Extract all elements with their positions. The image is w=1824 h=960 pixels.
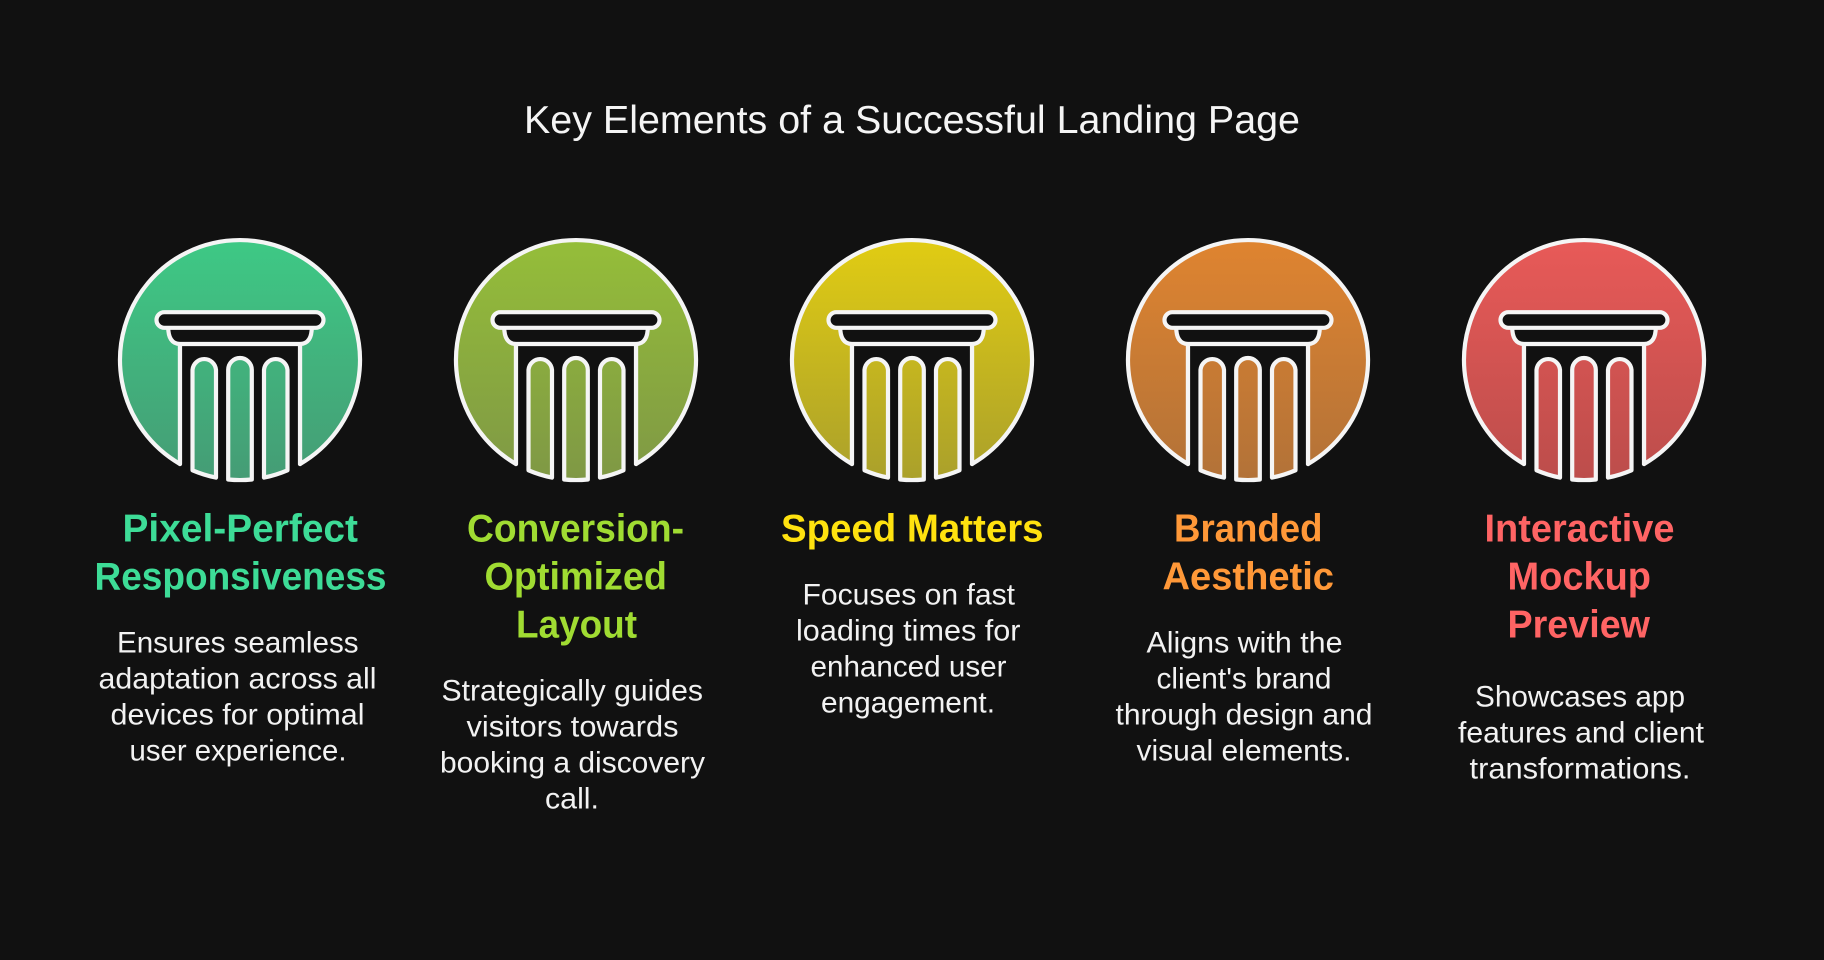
heading: branded aesthetic: Branded bbox=[1174, 508, 1322, 551]
icon: orange pillar bbox=[1128, 240, 1368, 480]
description: pixel-perfect responsiveness: adaptation across all bbox=[98, 662, 376, 695]
heading: interactive mockup preview: Preview bbox=[1508, 604, 1651, 647]
icon: green pillar bbox=[120, 240, 360, 480]
description: interactive mockup preview: transformations. bbox=[1470, 752, 1690, 786]
description: speed matters: engagement. bbox=[821, 686, 995, 719]
description: interactive mockup preview bbox=[1458, 680, 1704, 786]
description: branded aesthetic: visual elements. bbox=[1136, 734, 1352, 767]
title: Key Elements of a Successful Landing Page bbox=[524, 99, 1300, 142]
heading: interactive mockup preview bbox=[1484, 508, 1674, 647]
heading: conversion-optimized layout: Layout bbox=[516, 604, 637, 647]
description: speed matters: loading times for bbox=[796, 614, 1021, 647]
icon: yellow pillar bbox=[792, 240, 1032, 480]
description: pixel-perfect responsiveness: Ensures seamless bbox=[117, 626, 358, 659]
heading: interactive mockup preview: Interactive bbox=[1484, 508, 1674, 551]
panel: interactive mockup preview bbox=[1458, 240, 1704, 786]
description: conversion-optimized layout: booking a discovery bbox=[440, 746, 705, 780]
description: conversion-optimized layout: Strategically guides bbox=[442, 674, 703, 708]
description: speed matters: Focuses on fast bbox=[802, 578, 1015, 611]
description: conversion-optimized layout: call. bbox=[545, 782, 599, 816]
heading: conversion-optimized layout bbox=[467, 508, 684, 647]
description: branded aesthetic: client's brand bbox=[1156, 662, 1332, 695]
icon: red pillar bbox=[1464, 240, 1704, 480]
heading: pixel-perfect responsiveness: Pixel-Perfect bbox=[122, 508, 358, 551]
panel: speed matters bbox=[781, 240, 1044, 719]
description: pixel-perfect responsiveness: user experience. bbox=[130, 734, 346, 767]
heading: conversion-optimized layout: Conversion- bbox=[467, 508, 684, 551]
panel: conversion-optimized layout bbox=[440, 240, 705, 816]
heading: branded aesthetic: Aesthetic bbox=[1162, 556, 1334, 599]
heading: conversion-optimized layout: Optimized bbox=[484, 556, 667, 599]
description: interactive mockup preview: features and client bbox=[1458, 716, 1704, 750]
heading: branded aesthetic bbox=[1162, 508, 1334, 599]
description: branded aesthetic bbox=[1116, 626, 1372, 767]
description: pixel-perfect responsiveness: devices for optimal bbox=[110, 698, 364, 731]
panel: branded aesthetic bbox=[1116, 240, 1372, 767]
heading: interactive mockup preview: Mockup bbox=[1508, 556, 1651, 599]
description: conversion-optimized layout bbox=[440, 674, 705, 816]
description: pixel-perfect responsiveness bbox=[98, 626, 376, 767]
panel: pixel-perfect responsiveness bbox=[94, 240, 386, 767]
description: conversion-optimized layout: visitors towards bbox=[466, 710, 678, 744]
description: branded aesthetic: Aligns with the bbox=[1146, 626, 1342, 659]
description: speed matters: enhanced user bbox=[810, 650, 1007, 683]
description: speed matters bbox=[796, 578, 1021, 719]
heading: pixel-perfect responsiveness: Responsiveness bbox=[94, 556, 386, 599]
description: branded aesthetic: through design and bbox=[1116, 698, 1372, 731]
heading: pixel-perfect responsiveness bbox=[94, 508, 386, 599]
icon: olive pillar bbox=[456, 240, 696, 480]
description: interactive mockup preview: Showcases app bbox=[1475, 680, 1685, 714]
heading: speed matters: Speed Matters bbox=[781, 508, 1044, 551]
